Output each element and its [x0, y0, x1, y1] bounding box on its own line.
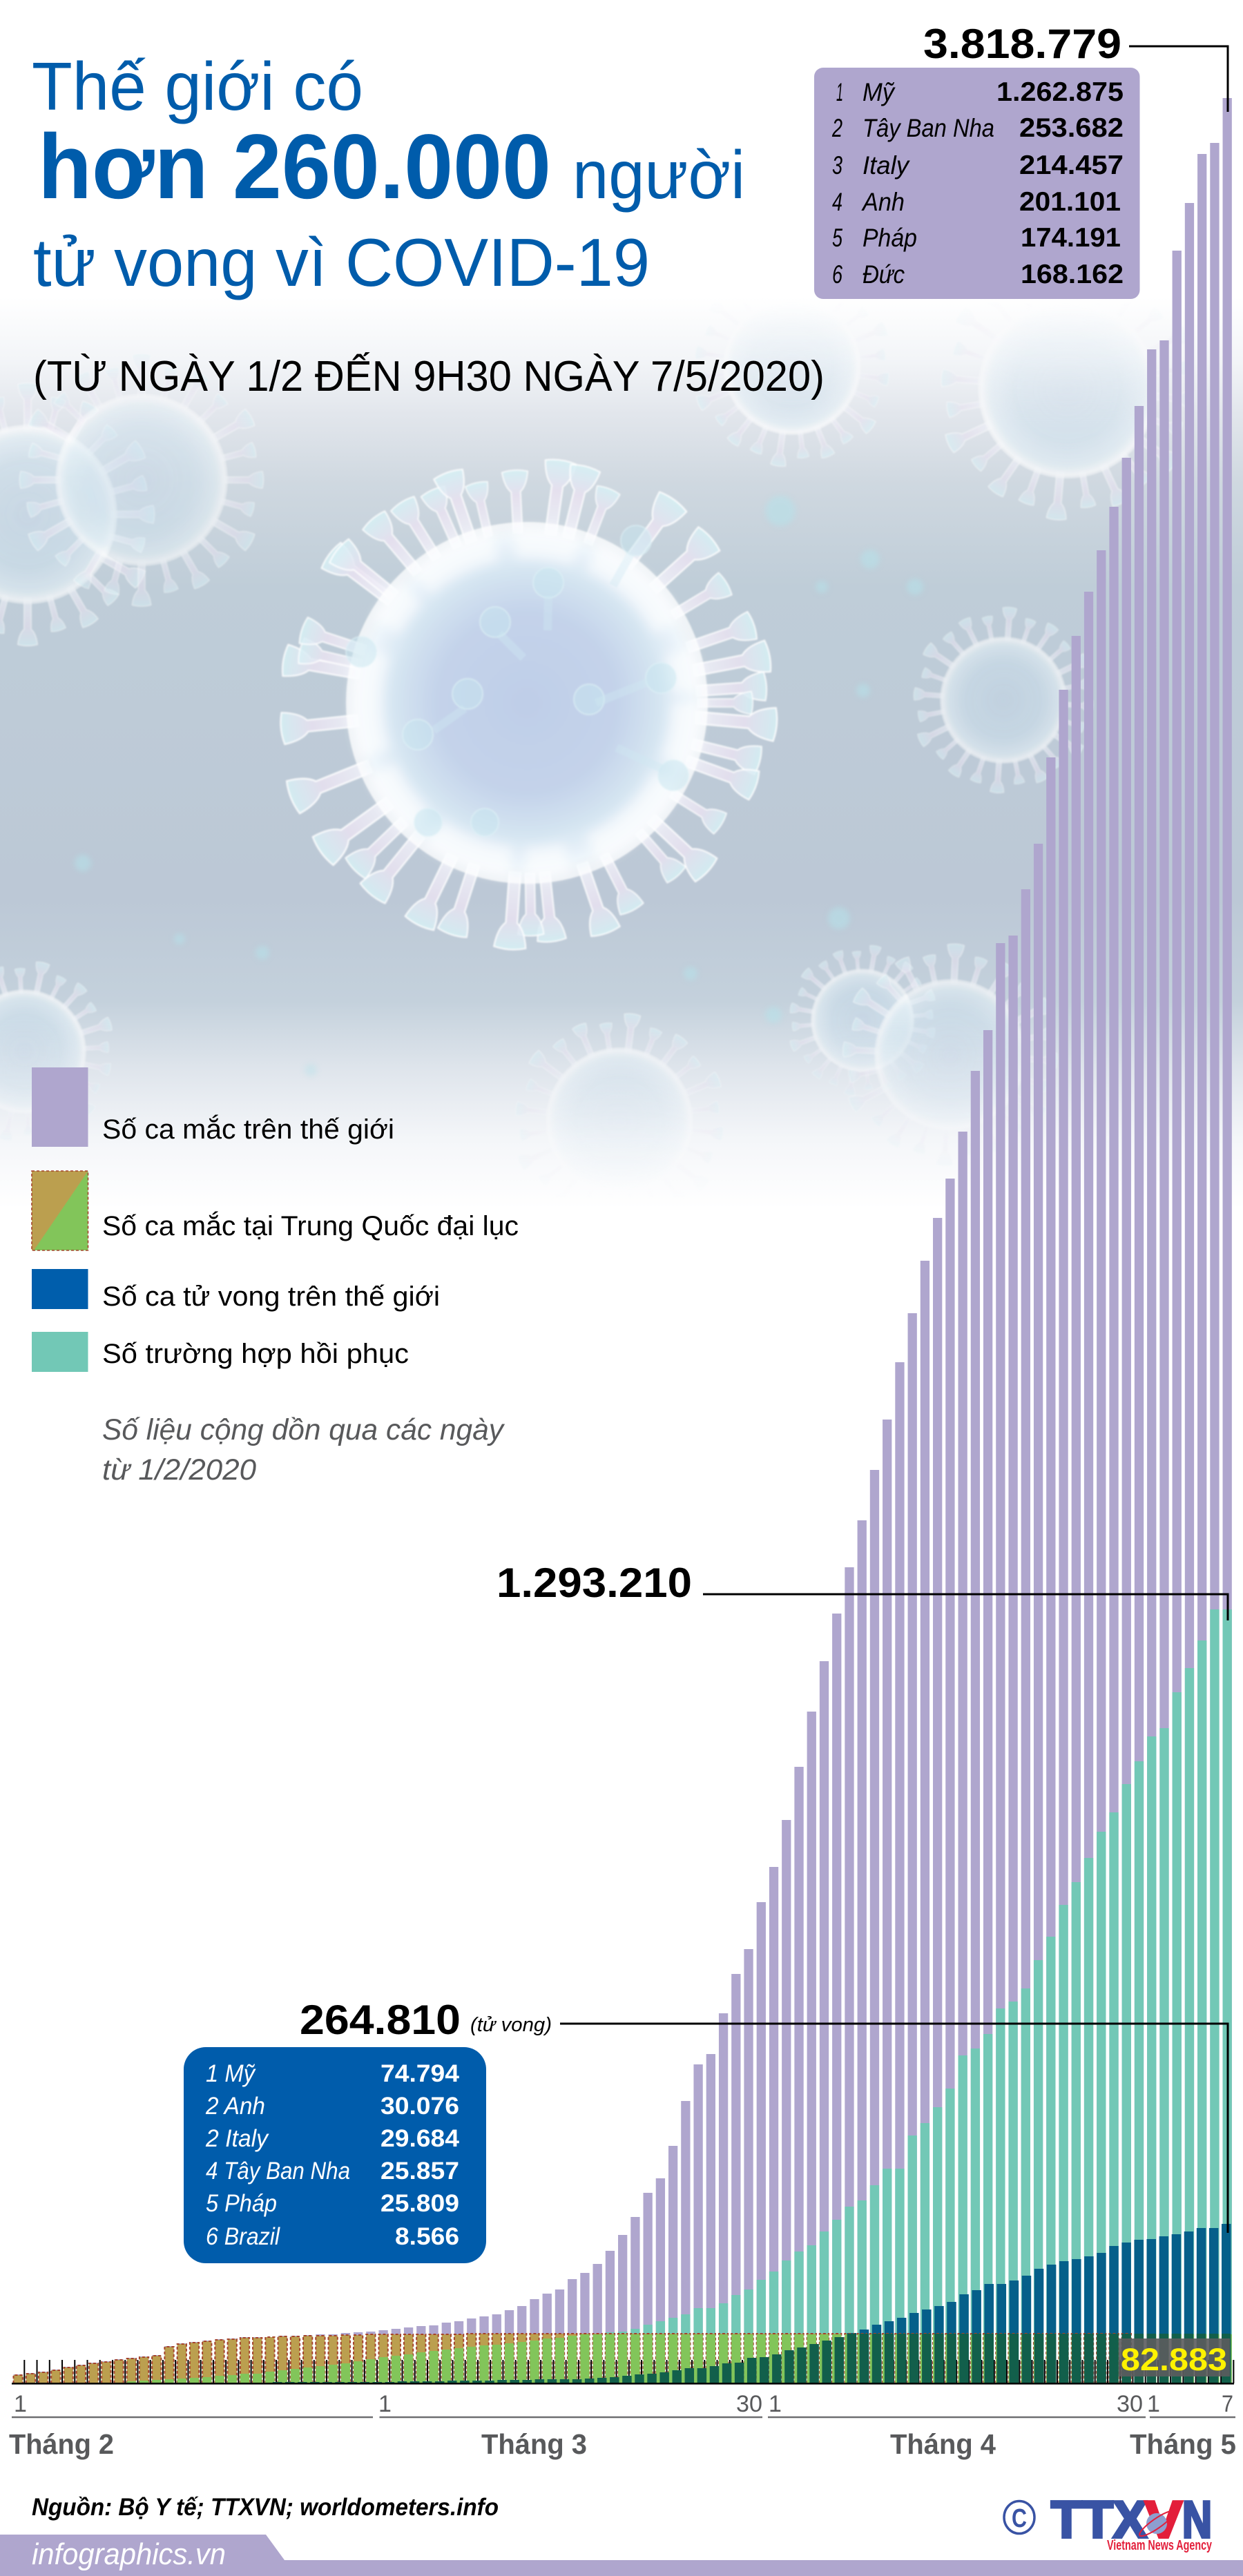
panel: top countries by cases: 6 — [832, 260, 842, 289]
bars: China cases — [14, 2334, 1131, 2383]
panel: top countries by cases: Pháp — [863, 224, 917, 252]
legend — [32, 1067, 519, 1486]
logo: TTXVN copyright: N — [1182, 2490, 1212, 2548]
panel: top countries by cases: 4 — [832, 188, 842, 216]
panel: top countries by deaths: 25.857 — [380, 2158, 459, 2185]
panel: top countries by deaths: 8.566 — [395, 2223, 459, 2250]
title: hơn 260.000 — [38, 116, 551, 218]
icon: virus lower middle — [530, 1013, 693, 1134]
legend: world deaths: Số ca tử vong trên thế giới — [102, 1281, 440, 1312]
legend: China cases: Số ca mắc tại Trung Quốc đại lục — [102, 1210, 519, 1241]
footer band — [0, 2535, 1243, 2576]
icon: large central virus — [279, 458, 778, 951]
icon: virus top left — [0, 383, 155, 646]
callout: deaths 264.810: 264.810 — [300, 1997, 461, 2043]
panel: top countries by deaths: 6 Brazil — [206, 2223, 280, 2250]
panel: top countries by cases: Tây Ban Nha — [863, 114, 994, 142]
title — [32, 48, 745, 300]
panel: top countries by cases: 1.262.875 — [996, 77, 1124, 107]
callout: deaths 264.810 — [300, 1997, 1228, 2233]
title: Thế giới có — [32, 48, 363, 124]
legend: China cases — [32, 1171, 519, 1250]
panel: top countries by deaths: 74.794 — [380, 2060, 460, 2087]
panel: top countries by cases — [814, 68, 1139, 299]
callout: deaths 264.810: (tử vong) — [470, 2014, 552, 2036]
title: tử vong vì COVID-19 — [33, 224, 650, 300]
source note: Nguồn: Bộ Y tế; TTXVN; worldometers.info — [32, 2494, 499, 2521]
axis: day and month labels: 1 — [14, 2391, 27, 2417]
legend note — [102, 1413, 505, 1486]
panel: top countries by deaths: 1 Mỹ — [206, 2060, 256, 2087]
panel: top countries by deaths: 4 Tây Ban Nha — [206, 2158, 350, 2185]
axis: day and month labels: Tháng 3 — [481, 2428, 587, 2460]
logo: TTXVN copyright — [1004, 2490, 1213, 2553]
panel: top countries by cases: 2 — [831, 114, 842, 142]
icon: virus lower right large — [843, 943, 1057, 1095]
icon: virus lower right small — [790, 945, 935, 1072]
logo: TTXVN copyright: C — [1012, 2504, 1027, 2533]
title: người — [572, 137, 745, 213]
panel: top countries by cases: 174.191 — [1021, 223, 1121, 253]
bars: deaths above China level — [851, 2224, 1226, 2383]
axis: day and month labels: 1 — [378, 2391, 392, 2417]
panel: top countries by cases: 168.162 — [1021, 260, 1124, 289]
panel: top countries by cases: Đức — [863, 260, 905, 289]
panel: top countries by deaths: 2 Italy — [205, 2125, 269, 2152]
subtitle: date range: (TỪ NGÀY 1/2 ĐẾN 9H30 NGÀY 7/5/2020) — [33, 353, 825, 400]
panel: top countries by cases: 253.682 — [1019, 113, 1124, 143]
icon: virus top left second — [19, 395, 264, 608]
callout: world cases 3.818.779 — [923, 21, 1228, 112]
axis baseline — [12, 2383, 1234, 2385]
panel: top countries by deaths: 29.684 — [380, 2125, 460, 2152]
bars: China recovered — [131, 2334, 1227, 2383]
legend: recovered — [32, 1332, 409, 1372]
footer band: infographics.vn — [32, 2537, 226, 2571]
axis: day and month labels — [9, 2391, 1236, 2460]
callout: recovered 1.293.210: 1.293.210 — [497, 1560, 692, 1606]
legend: recovered: Số trường hợp hồi phục — [102, 1339, 409, 1369]
axis: day and month labels: Tháng 4 — [890, 2428, 996, 2460]
panel: top countries by deaths: 25.809 — [380, 2190, 459, 2217]
panel: top countries by deaths: 5 Pháp — [206, 2190, 277, 2217]
panel: top countries by cases: 214.457 — [1019, 151, 1124, 180]
panel: top countries by cases: Italy — [863, 151, 910, 180]
axis: day and month labels: 1 — [1147, 2391, 1160, 2417]
panel: top countries by deaths — [184, 2047, 486, 2263]
panel: top countries by deaths: 2 Anh — [205, 2093, 265, 2120]
axis: day and month labels: Tháng 2 — [9, 2428, 114, 2460]
panel: top countries by cases: Anh — [861, 188, 905, 216]
panel: top countries by cases: Mỹ — [863, 78, 896, 106]
panel: top countries by cases: 1 — [836, 78, 843, 106]
bars: recovered — [610, 1609, 1227, 2383]
legend: world cases: Số ca mắc trên thế giới — [102, 1114, 394, 1145]
logo: TTXVN copyright: TTX — [1051, 2490, 1147, 2548]
legend: world deaths — [32, 1269, 440, 1312]
panel: top countries by cases: 3 — [832, 151, 842, 180]
bars: deaths overlapping China level — [153, 2334, 1226, 2383]
panel: top countries by deaths: 30.076 — [380, 2093, 459, 2120]
ticks: black day markers — [23, 2360, 1236, 2383]
axis: day and month labels: 1 — [769, 2391, 782, 2417]
panel: top countries by cases: 5 — [832, 224, 842, 252]
callout: world cases 3.818.779: 3.818.779 — [923, 21, 1121, 67]
axis: day and month labels: 30 — [1117, 2391, 1143, 2417]
axis: day and month labels: Tháng 5 — [1130, 2428, 1236, 2460]
icon: virus middle right — [913, 606, 1094, 794]
legend: world cases — [32, 1067, 394, 1147]
legend note: từ 1/2/2020 — [102, 1453, 256, 1486]
background: virus image panel — [0, 318, 1243, 1176]
icon: virus top centre right — [718, 339, 876, 467]
axis: day and month labels: 7 — [1222, 2391, 1233, 2417]
legend note: Số liệu cộng dồn qua các ngày — [102, 1413, 505, 1446]
callout: China total 82.883: 82.883 — [1121, 2342, 1227, 2377]
callout: recovered 1.293.210 — [497, 1560, 1228, 1620]
axis: day and month labels: 30 — [736, 2391, 762, 2417]
icon: virus lower left — [0, 961, 112, 1089]
panel: top countries by cases: 201.101 — [1019, 187, 1121, 217]
logo: TTXVN copyright: V — [1145, 2490, 1182, 2548]
icon: virus top right — [945, 341, 1185, 521]
